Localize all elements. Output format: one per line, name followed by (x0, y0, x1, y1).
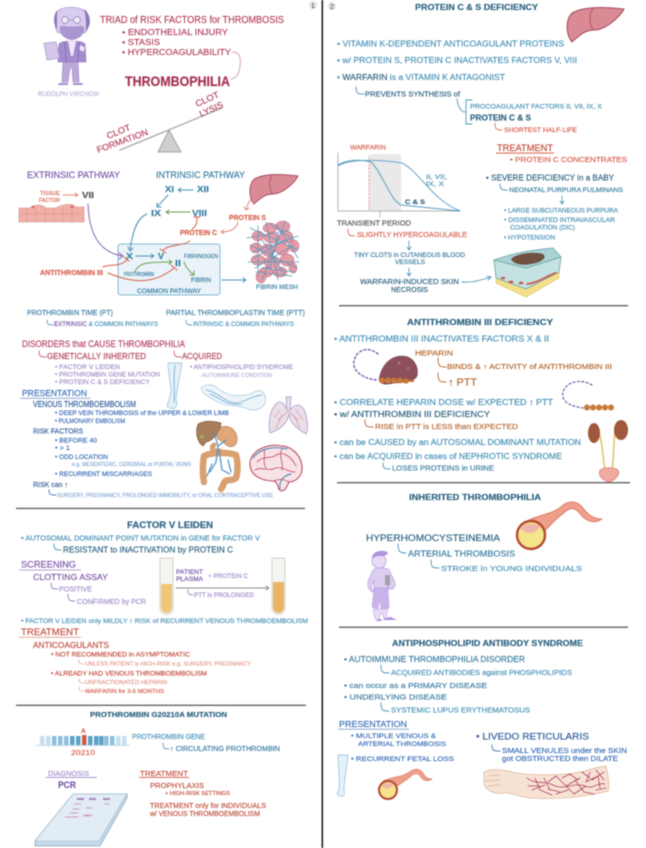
text: risk factors: RISK FACTORS (33, 426, 83, 436)
illustration: fibrin mesh (247, 221, 299, 283)
illustration: test tube before (160, 558, 173, 614)
label: clot lysis: LYSIS (198, 99, 225, 119)
label: clot lysis (194, 89, 225, 119)
panel: coagulation cascade (19, 170, 299, 295)
text: arterial thrombosis: ARTERIAL THROMBOSIS (408, 550, 515, 559)
list: correlate dose: • w/ ANTITHROMBIN III DEFICIENCY (334, 410, 491, 419)
illustration: abdominal organs (197, 421, 238, 489)
text: acquired: ACQUIRED (182, 351, 222, 361)
list: risk factors: • ENDOTHELIAL INJURY (122, 27, 228, 37)
list: anticoagulant guidance (51, 652, 251, 695)
label: clot formation: CLOT (105, 122, 133, 141)
underline: diagnosis (46, 776, 97, 779)
text: PT pathways: EXTRINSIC & COMMON PATHWAYS (54, 321, 158, 328)
list: anticoagulant guidance: WARFARIN for 3-6 MONTHS (85, 689, 164, 695)
heading: antithrombin III deficiency: ANTITHROMBIN III DEFICIENCY (407, 317, 553, 327)
text: risk can increase: RISK can ↑ (33, 480, 68, 489)
text: PCR: PCR (58, 780, 76, 790)
chart label: II VII IX X: II, VII, (426, 175, 447, 181)
tissue factor label: FACTOR (39, 198, 60, 204)
text: protein C and S: PROTEIN C & S (470, 114, 532, 123)
factor labels: II (175, 258, 181, 268)
list: causes: • can be ACQUIRED in cases of NEPHROTIC SYNDROME (334, 452, 562, 461)
list: inherited disorders: • PROTHROMBIN GENE MUTATION (55, 372, 160, 378)
illustration: heparin and antithrombin (354, 350, 417, 384)
illustration: liver (567, 8, 624, 42)
text: prothrombin gene: PROTHROMBIN GENE (132, 732, 205, 741)
text: confirmed: CONFIRMED by PCR (77, 599, 146, 606)
list: risk factors: e.g. MESENTERIC, CEREBRAL or PORTAL VEINS (72, 462, 191, 468)
page number 1 (309, 1, 317, 10)
panel: disorders that cause thrombophilia (20, 339, 308, 499)
heading: thrombophilia: THROMBOPHILIA (125, 74, 230, 89)
arrow (356, 87, 364, 94)
text: resistant: RESISTANT to INACTIVATION by PROTEIN C (63, 546, 233, 555)
label: fibrin mesh: FIBRIN MESH (256, 284, 298, 291)
text: neonatal purpura: NEONATAL PURPURA FULMINANS (509, 187, 623, 194)
arrows (398, 544, 439, 568)
text: partial thromboplastin time: PARTIAL THROMBOPLASTIN TIME (PTT) (166, 308, 305, 317)
text: slightly hypercoagulable: SLIGHTLY HYPERCOAGULABLE (357, 230, 467, 239)
label: 20210: 20210 (71, 750, 95, 757)
chart label: C and S: C & S (405, 199, 426, 206)
panel: inherited thrombophilia (366, 493, 602, 621)
label: clot lysis: CLOT (194, 89, 221, 109)
list: risk factors: • BEFORE 40 (55, 438, 97, 445)
text: livedo reticularis: • LIVEDO RETICULARIS (476, 732, 589, 742)
text: transient period: TRANSIENT PERIOD (337, 219, 411, 228)
heading: protein C and S: PROTEIN C & S DEFICIENCY (415, 2, 538, 12)
labels inside common pathway: PROTHROMBIN (124, 272, 154, 278)
arrow (365, 420, 373, 427)
label: warfarin: WARFARIN (350, 145, 386, 152)
list: anticoagulant guidance: UNLESS PATIENT is HIGH-RISK e.g. SURGERY, PREGNANCY (85, 662, 251, 668)
list: disease types (344, 681, 487, 702)
bracket (457, 99, 472, 124)
illustration: seesaw balance (120, 108, 222, 152)
factor labels: IX (151, 208, 161, 218)
arrows (381, 665, 389, 711)
underline: presentation (338, 729, 409, 730)
heading: screening: SCREENING (21, 560, 76, 570)
text: prophylaxis: PROPHYLAXIS (150, 781, 204, 790)
list: risk factors: • RECURRENT MISCARRIAGES (55, 471, 152, 478)
list: risk factors: • HYPERCOAGULABILITY (122, 47, 231, 57)
illustration: arm with livedo reticularis (484, 766, 609, 799)
arrow: tube to tube (176, 586, 269, 590)
list: severe deficiency findings: • HYPOTENSION (504, 235, 555, 242)
list: risk factors: • STASIS (122, 37, 160, 47)
arrow down (560, 196, 564, 204)
list: VTE: • PULMONARY EMBOLISM (55, 418, 125, 425)
list: disease types: • UNDERLYING DISEASE (344, 693, 447, 702)
list: VTE (55, 410, 229, 425)
arrow (348, 229, 355, 236)
text: shortest half life: SHORTEST HALF-LIFE (504, 127, 577, 134)
protein labels: PROTEIN S (229, 215, 266, 222)
illustration: kidneys and bladder (588, 420, 628, 482)
text: genetically inherited: GENETICALLY INHERITED (47, 351, 146, 361)
heading: treatment: TREATMENT (21, 627, 80, 637)
illustration: leg (337, 755, 348, 796)
list: risk factors (122, 27, 231, 57)
protein labels (180, 215, 266, 237)
text: treatment for VTE (149, 803, 266, 818)
chart label: II VII IX X (426, 175, 447, 188)
panel: triad and thrombophilia (38, 7, 284, 155)
list: causes: • can be CAUSED by an AUTOSOMAL DOMINANT MUTATION (334, 438, 581, 447)
text: circulating prothrombin: ↑ CIRCULATING PROTHROMBIN (170, 746, 280, 753)
arrow (54, 544, 61, 550)
arrow (163, 743, 169, 749)
illustration: electrophoresis gel (35, 794, 127, 846)
text: tiny clots: VESSELS (395, 259, 425, 266)
arrow (495, 123, 502, 130)
text: small venules: SMALL VENULES under the SKIN (502, 748, 627, 755)
list: risk factors: • > 1 (55, 445, 71, 452)
text: prothrombin time: PROTHROMBIN TIME (PT) (27, 308, 113, 317)
factor VII: VII (82, 190, 94, 200)
heading: antiphospholipid syndrome: ANTIPHOSPHOLIPID ANTIBODY SYNDROME (392, 638, 583, 648)
text: severe deficiency: • SEVERE DEFICIENCY in a BABY (486, 174, 615, 183)
list: severe deficiency findings: COAGULATION (DIC) (510, 225, 575, 232)
list: acquired disorder: • ANTIPHOSPHOLIPID SYNDROME (190, 364, 293, 371)
text: skin necrosis (360, 277, 459, 294)
list: correlate dose (334, 398, 553, 419)
bracket arrow (188, 590, 193, 595)
list: inherited disorders (55, 364, 160, 386)
text: antithrombin inactivates: • ANTITHROMBIN III INACTIVATES FACTORS X & II (334, 335, 549, 344)
arrow (500, 184, 507, 190)
text: patient plasma: PATIENT (176, 569, 203, 576)
heading: treatment: TREATMENT (140, 769, 189, 778)
text: high risk settings: + HIGH-RISK SETTINGS (165, 791, 231, 797)
text: anticoagulants: ANTICOAGULANTS (33, 641, 109, 650)
divider (16, 705, 306, 706)
center column divider (322, 0, 323, 848)
text: rise in PTT: RISE in PTT is LESS than EXPECTED (375, 424, 518, 431)
labels inside common pathway: FIBRIN (191, 277, 211, 284)
text: skin necrosis: WARFARIN-INDUCED SKIN (360, 277, 459, 286)
factor labels: VIII (192, 208, 207, 218)
labels inside common pathway (124, 254, 218, 295)
illustration: leg (167, 363, 182, 408)
underline: screening (19, 570, 81, 571)
factor labels (126, 184, 209, 268)
illustration: lungs (269, 397, 308, 434)
text: patient plasma: PLASMA (176, 576, 204, 583)
panel: antiphospholipid antibody syndrome (337, 638, 627, 799)
text: venous thromboembolism: VENOUS THROMBOEMBOLISM (33, 400, 136, 409)
label: A: A (81, 728, 86, 735)
underline: treatment (496, 153, 554, 154)
underline: treatment (139, 776, 189, 779)
list: anticoagulant guidance: UNFRACTIONATED HEPARIN (85, 680, 167, 686)
labels inside common pathway: COMMON PATHWAY (137, 288, 202, 295)
illustration: liver (250, 174, 298, 204)
illustration: inactive antithrombin chain (563, 381, 614, 410)
text: autoimmune disorder: • AUTOIMMUNE THROMBOPHILIA DISORDER (344, 655, 525, 664)
text: tiny clots: TINY CLOTS in CUTANEOUS BLOOD (354, 252, 465, 259)
page number 2: 2 (330, 4, 334, 11)
heading: presentation: PRESENTATION (339, 719, 407, 729)
arrow (492, 745, 500, 751)
text: mildly increased risk: • FACTOR V LEIDEN only MILDLY ↑ RISK of RECURRENT VENOUS THROMBOEMBOLISM (21, 618, 308, 625)
underline: treatment (19, 637, 81, 638)
illustration: young person (368, 551, 397, 621)
text: skin necrosis: NECROSIS (391, 285, 428, 294)
factor labels: XI (165, 184, 174, 194)
text: loses proteins: LOSES PROTEINS in URINE (392, 466, 494, 473)
panel: clotting time tests (27, 308, 305, 328)
list: severe deficiency findings: • LARGE SUBCUTANEOUS PURPURA (504, 208, 619, 215)
antithrombin label: ANTITHROMBIN III (40, 268, 103, 277)
list: presentation: ARTERIAL THROMBOSIS (358, 741, 447, 748)
panel: antithrombin III deficiency (334, 317, 628, 482)
arrows: treatment sublist (79, 660, 84, 691)
heading: extrinsic pathway: EXTRINSIC PATHWAY (27, 170, 120, 180)
chart label: II VII IX X: IX, X (426, 182, 444, 188)
arrows: inherited and acquired (39, 351, 181, 357)
arrows: heparin (438, 358, 446, 382)
underline: presentation (20, 398, 90, 399)
illustration: brain (250, 445, 302, 491)
label: clot formation: FORMATION (95, 127, 149, 155)
page number 2 (328, 2, 336, 11)
text: small venules: got OBSTRUCTED then DILATE (502, 756, 618, 763)
divider (339, 626, 628, 628)
protein labels: PROTEIN C (180, 230, 217, 237)
illustration: artery with plaque (517, 502, 602, 549)
illustration: arm (201, 385, 266, 410)
list: disease types: • can occur as a PRIMARY DISEASE (344, 681, 487, 690)
list: protein C facts: • WARFARIN is a VITAMIN K ANTAGONIST (337, 73, 505, 82)
tissue factor label (39, 191, 61, 204)
arrow: PTT (186, 320, 192, 325)
common pathway box (118, 244, 220, 295)
divider (339, 305, 628, 306)
factor labels: V (158, 251, 164, 261)
text: PTT pathways: INTRINSIC & COMMON PATHWAYS (193, 321, 294, 328)
list: inherited disorders: • FACTOR V LEIDEN (55, 364, 120, 371)
list: protein C facts (337, 40, 577, 82)
illustration: test tube after (272, 558, 285, 614)
list: VTE: • DEEP VEIN THROMBOSIS of the UPPER & LOWER LIMB (55, 410, 229, 417)
list: acquired disorder: - AUTOIMMUNE CONDITION (199, 373, 272, 379)
text: acquired antibodies: ACQUIRED ANTIBODIES against PHOSPHOLIPIDS (391, 670, 572, 677)
illustration: endothelium (19, 204, 84, 222)
list: causes (334, 438, 581, 461)
list: protein C facts: • w/ PROTEIN S, PROTEIN C INACTIVATES FACTORS V, VIII (337, 56, 577, 65)
arrow: PT (47, 320, 53, 325)
text: binds and increases activity: BINDS & ↑ ACTIVITY of ANTITHROMBIN III (447, 364, 612, 371)
text: treatment for VTE: TREATMENT only for INDIVIDUALS (150, 803, 266, 810)
list: correlate dose: • CORRELATE HEPARIN DOSE w/ EXPECTED ↑ PTT (334, 398, 553, 407)
factor labels: X (126, 251, 133, 261)
illustration: gene strip (36, 735, 130, 746)
arrow down (407, 241, 411, 250)
arrows: screening (51, 583, 75, 601)
text: prevents synthesis: PREVENTS SYNTHESIS of (365, 92, 460, 99)
illustration: skin block (494, 248, 561, 297)
text: systemic lupus: SYSTEMIC LUPUS ERYTHEMATOSUS (391, 708, 530, 715)
text: plus protein C: + PROTEIN C (208, 573, 249, 580)
panel: protein C and S deficiency (337, 2, 627, 297)
list: risk factors (55, 438, 191, 478)
list: presentation (351, 733, 455, 763)
caption: Rudolph Virchow: RUDOLPH VIRCHOW (38, 91, 100, 98)
heading: presentation: PRESENTATION (22, 388, 87, 398)
heading: factor V Leiden: FACTOR V LEIDEN (127, 520, 213, 530)
heading: treatment: TREATMENT (497, 143, 554, 153)
arrow down (407, 268, 411, 276)
labels inside common pathway: FIBRINOGEN (184, 254, 218, 260)
text: small venules (502, 748, 627, 763)
text: procoagulant factors: PROCOAGULANT FACTORS II, VII, IX, X (470, 104, 603, 111)
factor labels: XII (197, 184, 209, 194)
bracket to thrombophilia (231, 52, 240, 79)
list: anticoagulant guidance: • NOT RECOMMENDED in ASYMPTOMATIC (51, 652, 190, 659)
panel: prothrombin G20210A mutation (35, 712, 280, 846)
list: severe deficiency findings (504, 208, 619, 242)
heading: triad of risk factors: TRIAD of RISK FACTORS for THROMBOSIS (100, 15, 284, 26)
list: presentation: • MULTIPLE VENOUS & (351, 733, 437, 740)
list: anticoagulant guidance: • ALREADY HAD VENOUS THROMBOEMBOLISM (51, 671, 207, 678)
text: PTT prolonged: PTT is PROLONGED (194, 593, 255, 599)
tissue factor label: TISSUE (40, 191, 61, 197)
text: patient plasma (176, 569, 204, 583)
illustration: artery small (379, 769, 432, 799)
list: protein C facts: • VITAMIN K-DEPENDENT ANTICOAGULANT PROTEINS (337, 40, 564, 49)
panel: factor V Leiden (19, 520, 308, 695)
arrow: risk (49, 490, 56, 495)
heading: prothrombin mutation: PROTHROMBIN G20210A MUTATION (90, 712, 227, 719)
heading: inherited thrombophilia: INHERITED THROMBOPHILIA (409, 493, 541, 502)
divider (16, 508, 305, 509)
text: tiny clots (354, 252, 465, 266)
list: risk factors: • ODD LOCATION (55, 454, 108, 461)
illustration: Rudolph Virchow (44, 7, 90, 85)
page number 1: 1 (311, 3, 315, 10)
heading: diagnosis: DIAGNOSIS (48, 769, 89, 778)
heading: intrinsic pathway: INTRINSIC PATHWAY (156, 170, 245, 180)
text: protein C concentrates: • PROTEIN C CONCENTRATES (510, 155, 627, 164)
arrow to skin (462, 276, 491, 282)
text: hyperhomocysteinemia: HYPERHOMOCYSTEINEMIA (366, 533, 500, 543)
list: acquired disorder (190, 364, 293, 379)
heading: disorders: DISORDERS that CAUSE THROMBOPHILIA (22, 339, 185, 349)
text: treatment for VTE: w/ VENOUS THROMBOEMBOLISM (149, 811, 260, 818)
list: presentation: • RECURRENT FETAL LOSS (351, 756, 455, 763)
list: inherited disorders: • PROTEIN C & S DEFICIENCY (55, 379, 151, 386)
text: increased PTT: ↑ PTT (448, 378, 477, 389)
text: autosomal dominant: • AUTOSOMAL DOMINANT POINT MUTATION in GENE for FACTOR V (21, 534, 260, 543)
divider (337, 482, 630, 483)
text: heparin: HEPARIN (415, 349, 453, 358)
arrow (383, 463, 390, 469)
text: triggers: SURGERY, PREGNANCY, PROLONGED IMMOBILITY, or ORAL CONTRACEPTIVE USE (57, 493, 273, 499)
text: clotting assay: CLOTTING ASSAY (33, 572, 108, 582)
chart: factor levels after warfarin (338, 153, 460, 217)
text: positive: POSITIVE (59, 587, 92, 594)
cascade arrows (63, 188, 254, 282)
text: stroke in young: STROKE in YOUNG INDIVIDUALS (441, 564, 582, 573)
list: severe deficiency findings: • DISSEMINATED INTRAVASCULAR (504, 217, 616, 224)
